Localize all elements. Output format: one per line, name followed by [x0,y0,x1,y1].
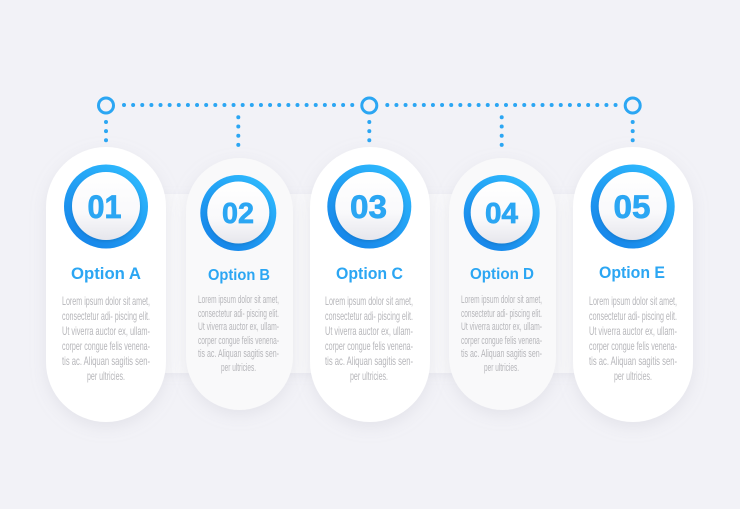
body text: corper congue felis venena- [589,339,677,353]
body text: per ultricies. [221,362,256,374]
body text: corper congue felis venena- [198,335,279,347]
heading: Option A [71,264,141,283]
body text [461,294,542,374]
body text: Ut viverra auctor ex, ullam- [325,324,413,338]
body text: Lorem ipsum dolor sit amet, [325,294,413,308]
body text: tis ac. Aliquan sagitis sen- [461,348,542,360]
heading: Option E [599,263,665,282]
number badge 05: 05 [614,189,650,225]
panel: option A [46,147,166,422]
number badge 01 [64,164,148,248]
body text: per ultricies. [350,369,388,383]
body text: tis ac. Aliquan sagitis sen- [325,354,413,368]
panel: option B [186,158,293,410]
body text: consectetur adi- piscing elit. [589,309,677,323]
number badge 02: 02 [222,198,254,230]
body text: Lorem ipsum dolor sit amet, [198,294,279,306]
heading: Option D [470,266,534,283]
body text [325,294,413,383]
body text: consectetur adi- piscing elit. [198,308,279,320]
number badge 03 [327,164,411,248]
body text: corper congue felis venena- [325,339,413,353]
heading: Option C [336,264,403,283]
number badge 04: 04 [485,198,518,230]
body text: Lorem ipsum dolor sit amet, [62,294,150,308]
panel: option C [310,147,430,422]
connecting band behind cards [120,194,620,373]
panel: option D [449,158,556,410]
body text [198,294,279,374]
body text: Ut viverra auctor ex, ullam- [461,321,542,333]
body text: consectetur adi- piscing elit. [325,309,413,323]
number badge 03: 03 [350,189,387,225]
body text [62,294,150,383]
body text: consectetur adi- piscing elit. [62,309,150,323]
body text: Ut viverra auctor ex, ullam- [589,324,677,338]
number badge 02 [200,175,276,251]
number badge 01: 01 [88,189,122,225]
body text: tis ac. Aliquan sagitis sen- [198,348,279,360]
heading: Option B [208,267,270,284]
body text: tis ac. Aliquan sagitis sen- [589,354,677,368]
body text: per ultricies. [87,369,125,383]
body text: Ut viverra auctor ex, ullam- [62,324,150,338]
body text: Lorem ipsum dolor sit amet, [461,294,542,306]
body text: tis ac. Aliquan sagitis sen- [62,354,150,368]
body text: per ultricies. [484,362,519,374]
body text: Ut viverra auctor ex, ullam- [198,321,279,333]
panel: option E [573,147,693,422]
body text: corper congue felis venena- [62,339,150,353]
number badge 05 [591,164,675,248]
body text: Lorem ipsum dolor sit amet, [589,294,677,308]
timeline connector [98,98,640,146]
body text: per ultricies. [614,369,652,383]
body text [589,294,677,383]
body text: corper congue felis venena- [461,335,542,347]
number badge 04 [464,175,540,251]
body text: consectetur adi- piscing elit. [461,308,542,320]
